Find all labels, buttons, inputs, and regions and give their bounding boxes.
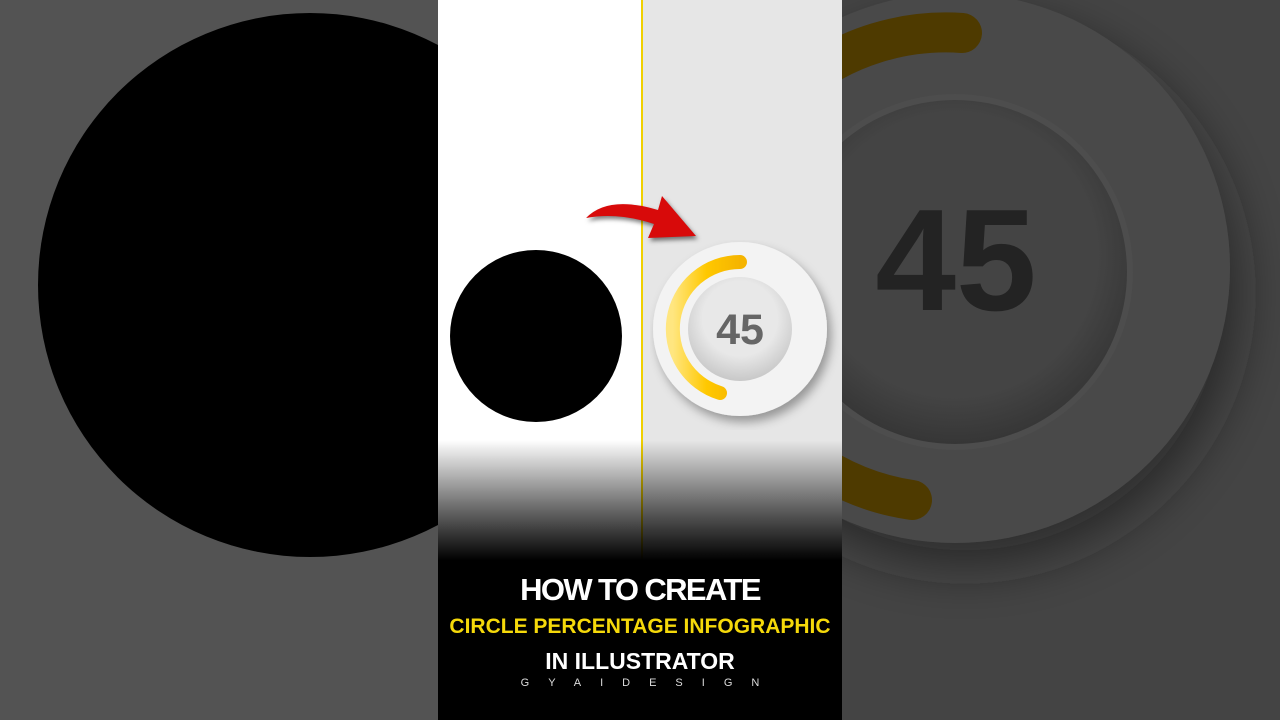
title block: [449, 572, 831, 689]
bottom dark gradient: [438, 440, 842, 720]
center panel: [438, 0, 842, 720]
title line 1: HOW TO CREATE: [520, 572, 760, 607]
yellow divider line: [641, 0, 643, 720]
big black circle: [38, 13, 582, 557]
percentage ring: [651, 242, 837, 428]
black circle: [450, 250, 622, 422]
brand: GYAIDESIGN: [521, 677, 778, 689]
title line 3: IN ILLUSTRATOR: [545, 648, 735, 674]
arrow: [586, 196, 700, 244]
left blurred background panel: [0, 0, 438, 720]
number 45: 45: [716, 306, 764, 354]
big 45: 45: [875, 179, 1037, 341]
big zoomed ring: [842, 5, 1259, 587]
right blurred background panel: [842, 0, 1280, 720]
title line 2: CIRCLE PERCENTAGE INFOGRAPHIC: [449, 615, 831, 638]
